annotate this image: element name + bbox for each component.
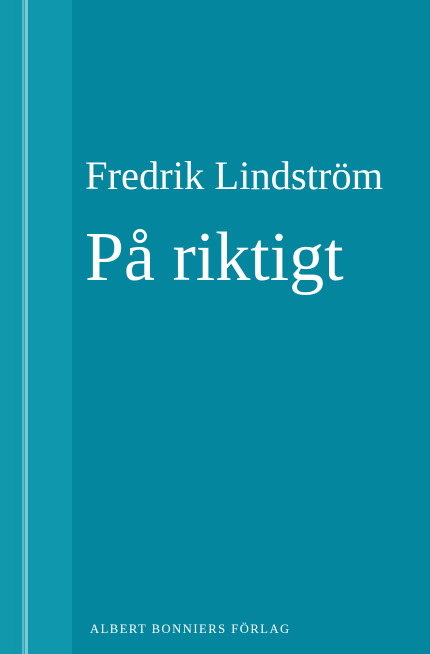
spine stripes <box>22 0 28 654</box>
book title: På riktigt <box>85 219 344 296</box>
publisher name: ALBERT BONNIERS FÖRLAG <box>90 622 291 636</box>
panel: outer spine shade <box>0 0 15 654</box>
author name: Fredrik Lindström <box>85 153 383 198</box>
panel: left spine band <box>0 0 72 654</box>
